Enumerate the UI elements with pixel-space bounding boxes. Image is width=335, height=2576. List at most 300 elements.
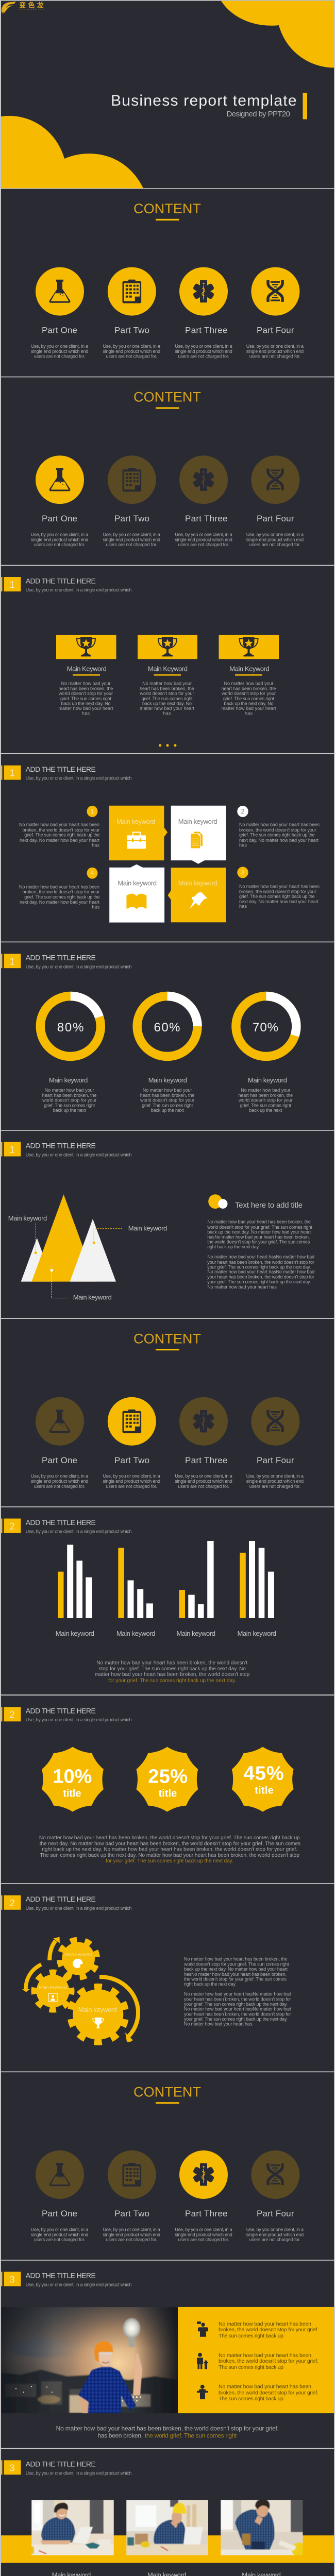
panel: three trophy cards xyxy=(1,577,279,747)
icon: star of life xyxy=(179,267,228,316)
chart: triangles xyxy=(8,1194,167,1301)
icon: dna xyxy=(251,1397,299,1446)
part two: Part Two xyxy=(114,514,149,523)
description: single end product which end xyxy=(246,349,304,354)
paragraph: for your grief. The sun comes right back up the next day. xyxy=(106,1858,233,1864)
card text: heart has been broken, the xyxy=(59,686,113,691)
paragraph 1: back up the next day. No matter how bad your heart xyxy=(184,1967,288,1972)
paragraph xyxy=(95,1660,250,1684)
part four xyxy=(246,2150,304,2242)
text 2: broken, the world doesn't stop for your xyxy=(239,827,316,833)
section header: 1 xyxy=(10,1145,15,1155)
icon: book xyxy=(126,894,146,909)
text xyxy=(219,2321,319,2339)
text: broken, the world doesn't stop for your grief. xyxy=(219,2358,319,2364)
panel: bar charts: Main keyword xyxy=(238,1630,276,1637)
paragraph 2 xyxy=(207,1255,314,1290)
square two: Main keyword xyxy=(178,818,217,825)
text 4: broken, the world doesn't stop for your xyxy=(23,889,100,894)
arrow: right xyxy=(99,1977,138,2042)
card text: grief. The sun comes right xyxy=(223,696,274,701)
description: single end product which end xyxy=(31,2232,88,2237)
donut 80%: 80% xyxy=(57,1021,83,1035)
chart: triangles: Main keyword xyxy=(128,1225,167,1232)
description xyxy=(31,532,88,547)
heading: CONTENT: CONTENT xyxy=(133,2084,201,2100)
description xyxy=(246,344,304,359)
part one xyxy=(31,455,88,547)
card text: has xyxy=(82,711,90,716)
card text: has xyxy=(163,711,171,716)
section header xyxy=(1,953,131,969)
section header: Use, by you or one client, in a single end product which xyxy=(26,1529,131,1534)
part two xyxy=(103,1397,160,1489)
part three xyxy=(175,2150,232,2242)
donut text 3: heart has been broken, the xyxy=(238,1093,293,1098)
description xyxy=(175,1473,232,1489)
panel: content overview, all parts xyxy=(31,201,304,359)
gear: palette xyxy=(53,1934,104,1984)
photo: builder leaning over plans xyxy=(221,2499,306,2557)
heading: CONTENT: CONTENT xyxy=(133,1331,201,1346)
icon: clipboard xyxy=(108,455,156,504)
panel: content, part three active xyxy=(31,2084,304,2242)
paragraph: stop for your grief. The sun comes right back up the next day. No xyxy=(99,1666,246,1672)
text 4: No matter how bad your heart has been xyxy=(19,884,99,889)
card text: world doesn't stop for your xyxy=(58,691,113,696)
icon: clipboard xyxy=(108,267,156,316)
panel: percentage badges xyxy=(1,1706,300,1864)
card text xyxy=(221,681,276,716)
part three: Part Three xyxy=(185,514,228,523)
yellow strip xyxy=(1,2535,334,2563)
subtitle: Designed by PPT20 xyxy=(227,110,290,118)
section header xyxy=(1,765,131,781)
card two xyxy=(138,635,197,716)
part four xyxy=(246,455,304,547)
description xyxy=(31,344,88,359)
text 4: next day. No matter how bad your heart xyxy=(20,900,99,905)
donut text 2: heart has been broken, the xyxy=(140,1093,194,1098)
description: Use, by you or one client, in a xyxy=(175,1473,232,1479)
text 2 xyxy=(239,822,320,848)
section header: Use, by you or one client, in a single end product which xyxy=(26,2282,131,2287)
description: users are not charged for. xyxy=(106,1484,157,1489)
part three xyxy=(175,455,232,547)
icon: trophy xyxy=(138,635,197,659)
description xyxy=(246,1473,304,1489)
part one: Part One xyxy=(42,514,77,523)
section header: 3 xyxy=(10,2275,15,2285)
pagination dots xyxy=(159,744,176,747)
description: Use, by you or one client, in a xyxy=(31,2227,88,2232)
donut text 3: No matter how bad your xyxy=(241,1088,290,1093)
icon: two circles xyxy=(208,1194,228,1209)
part one: Part One xyxy=(42,2209,77,2218)
donut text 3: back up the next xyxy=(249,1108,282,1113)
badge 10%: 10% xyxy=(53,1766,92,1787)
part one xyxy=(31,267,88,359)
paragraph 2: your heart has been broken, the world doesn't stop for xyxy=(207,1275,314,1280)
part four: Part Four xyxy=(257,2209,294,2218)
part four: Part Four xyxy=(257,326,294,335)
description: Use, by you or one client, in a xyxy=(31,1473,88,1479)
paragraph 1: right back up the next day. xyxy=(207,1244,260,1249)
caption: the world grief. The sun comes right xyxy=(145,2432,237,2439)
part two: Part Two xyxy=(114,2209,149,2218)
icon: dna xyxy=(251,2150,299,2199)
donut 70%: 70% xyxy=(253,1021,278,1035)
part one xyxy=(31,2150,88,2242)
text 2: has xyxy=(239,843,247,848)
donut text 3: world doesn't stop for your xyxy=(238,1098,293,1103)
paragraph 2: No matter how bad your heart hasNo matter how bad xyxy=(184,1992,291,1997)
donut 60%: 60% xyxy=(154,1021,180,1035)
description: users are not charged for. xyxy=(106,2237,157,2242)
description xyxy=(31,1473,88,1489)
donut text 2: world doesn't stop for your xyxy=(140,1098,194,1103)
part one: Part One xyxy=(42,326,77,335)
description xyxy=(175,532,232,547)
heading: CONTENT: CONTENT xyxy=(133,389,201,405)
gear: palette: Main keyword xyxy=(64,1952,92,1957)
text 1: No matter how bad your heart has been xyxy=(19,822,99,827)
description: single end product which end xyxy=(246,537,304,543)
icon: clipboard xyxy=(108,1397,156,1446)
description xyxy=(103,2227,160,2242)
panel: bar charts: Main keyword xyxy=(176,1630,215,1637)
badge 1 xyxy=(87,806,98,817)
donut text 1 xyxy=(42,1088,97,1113)
icon: flask xyxy=(36,2150,84,2199)
card text: No matter how bad your xyxy=(142,681,192,686)
paragraph 1: hasNo matter how bad your heart has been broken, xyxy=(184,1972,287,1977)
card three xyxy=(219,635,279,716)
paragraph 1: No matter how bad your heart has been broken, the xyxy=(207,1219,311,1225)
caption: has been broken, xyxy=(98,2432,143,2439)
section header: 3 xyxy=(10,2463,15,2473)
paragraph 1: right back up the next day. xyxy=(184,1981,237,1987)
text 1: next day. No matter how bad your heart xyxy=(20,838,99,843)
description: users are not charged for. xyxy=(34,542,85,547)
paragraph 1: the world doesn't stop for your grief. The sun comes xyxy=(184,1976,287,1981)
paragraph 1: the world doesn't stop for your grief. The sun comes xyxy=(207,1240,310,1245)
bar chart group 1 xyxy=(58,1545,92,1618)
square four xyxy=(109,865,164,922)
gear: trophy xyxy=(66,1983,129,2046)
text 4: has xyxy=(92,904,100,909)
photo: builder in yellow helmet with laptop xyxy=(126,2500,209,2556)
bar chart group 2 xyxy=(118,1548,153,1618)
text xyxy=(219,2352,319,2370)
paragraph 2: No matter how bad your heart hasNo matter how bad xyxy=(207,1255,314,1260)
description: Use, by you or one client, in a xyxy=(103,2227,160,2232)
donut text 1: back up the next xyxy=(53,1108,86,1113)
part three: Part Three xyxy=(185,326,228,335)
card one: Main Keyword xyxy=(67,665,107,672)
badge 45% xyxy=(232,1747,294,1812)
card text: world doesn't stop for your xyxy=(221,691,276,696)
description: Use, by you or one client, in a xyxy=(175,532,232,537)
section header: 2 xyxy=(10,1709,15,1720)
section header: Use, by you or one client, in a single end product which xyxy=(26,1717,131,1722)
text 3: No matter how bad your heart has been xyxy=(239,884,320,889)
section header: ADD THE TITLE HERE xyxy=(26,1895,96,1903)
text xyxy=(219,2384,319,2402)
icon: briefcase xyxy=(127,832,146,849)
description: Use, by you or one client, in a xyxy=(103,344,160,349)
gear: contact: Main keyword xyxy=(39,1985,67,1990)
description: single end product which end xyxy=(246,2232,304,2237)
donut text 1: No matter how bad your xyxy=(45,1088,94,1093)
badge 3 xyxy=(237,867,248,878)
paragraph 2: No matter how bad your heart hasNo matter how bad xyxy=(184,2007,291,2012)
description: users are not charged for. xyxy=(106,542,157,547)
panel: yellow points xyxy=(178,2307,334,2413)
panel: three photos xyxy=(1,2460,334,2576)
card text xyxy=(58,681,113,716)
card text: heart has been broken, the xyxy=(222,686,276,691)
card text: world doesn't stop for your xyxy=(139,691,194,696)
description: single end product which end xyxy=(175,349,232,354)
text: broken, the world doesn't stop for your grief. xyxy=(219,2327,319,2333)
donut 60% xyxy=(137,996,197,1056)
section header: 2 xyxy=(10,1898,15,1908)
panel: content, part two active xyxy=(31,1331,304,1489)
donut text 2: back up the next xyxy=(151,1108,184,1113)
caption xyxy=(56,2425,279,2439)
text 4: grief. The sun comes right back up the xyxy=(24,894,100,900)
description: users are not charged for. xyxy=(178,354,229,359)
description: single end product which end xyxy=(31,1479,88,1484)
description xyxy=(103,344,160,359)
panel: three donut charts: Main keyword xyxy=(248,1076,287,1084)
accent bar xyxy=(303,93,307,120)
description: users are not charged for. xyxy=(178,1484,229,1489)
description: Use, by you or one client, in a xyxy=(175,344,232,349)
description: single end product which end xyxy=(175,537,232,543)
text 3 xyxy=(239,884,320,909)
paragraph 2: No matter how bad your heart has. xyxy=(184,2022,254,2027)
card text: grief. The sun comes right xyxy=(141,696,193,701)
donut text 3 xyxy=(238,1088,293,1113)
part four: Part Four xyxy=(257,514,294,523)
section header xyxy=(1,1142,131,1157)
description: single end product which end xyxy=(103,2232,160,2237)
section header: 1 xyxy=(10,768,15,778)
description: users are not charged for. xyxy=(249,542,300,547)
description: users are not charged for. xyxy=(106,354,157,359)
paragraph 1: world doesn't stop for your grief. The sun comes right xyxy=(207,1225,312,1230)
section header: ADD THE TITLE HERE xyxy=(26,1706,96,1715)
section header: Use, by you or one client, in a single end product which xyxy=(26,776,131,781)
paragraph: right back up the next day. No matter how bad your heart has been broken, the world doesn't stop for your grief. xyxy=(42,1846,297,1852)
section header: Use, by you or one client, in a single end product which xyxy=(26,587,131,592)
donut text 3: grief. The sun comes right xyxy=(240,1103,291,1108)
description xyxy=(103,532,160,547)
paragraph 1 xyxy=(207,1219,312,1249)
card text xyxy=(139,681,194,716)
paragraph: The sun comes right back up the next day. No matter how bad your heart has been broken, the world doesn't stop xyxy=(40,1853,299,1858)
arrow: left xyxy=(22,1964,41,1992)
text 4 xyxy=(19,884,100,909)
section header xyxy=(1,577,131,592)
paragraph 2: your grief. The sun comes right back up the next day. xyxy=(184,2002,288,2007)
section header: ADD THE TITLE HERE xyxy=(26,1142,96,1150)
badge 25%: title xyxy=(159,1788,177,1800)
panel: cover slide xyxy=(1,1,334,188)
description: single end product which end xyxy=(175,1479,232,1484)
description: users are not charged for. xyxy=(34,354,85,359)
description: single end product which end xyxy=(175,2232,232,2237)
part one xyxy=(31,1397,88,1489)
icon: star of life xyxy=(179,1397,228,1446)
card text: matter how bad your heart xyxy=(59,706,113,711)
description: Use, by you or one client, in a xyxy=(31,532,88,537)
bar chart group 3 xyxy=(179,1541,214,1618)
heading: CONTENT: CONTENT xyxy=(133,201,201,216)
panel: mountains diagram xyxy=(1,1142,314,1301)
panel: three donut charts: Main keyword xyxy=(148,1076,187,1084)
panel: gears xyxy=(1,1895,291,2046)
badge 45%: 45% xyxy=(244,1762,284,1784)
icon: pin xyxy=(190,892,207,909)
text: The sun comes right back up xyxy=(219,2364,283,2370)
paragraph 2 xyxy=(184,1992,291,2027)
logo xyxy=(2,1,44,13)
description: single end product which end xyxy=(103,349,160,354)
card one xyxy=(56,635,116,716)
description: single end product which end xyxy=(31,349,88,354)
section header: ADD THE TITLE HERE xyxy=(26,577,96,585)
paragraph 2: your heart has been broken, the world doesn't stop for xyxy=(184,1997,291,2002)
photo: woman in hard hat pointing at light bulb over a city at dusk xyxy=(1,2307,178,2414)
text 1 xyxy=(19,822,100,848)
paragraph xyxy=(39,1835,300,1864)
part one: Part One xyxy=(42,1455,77,1465)
text 3: grief. The sun comes right back up the xyxy=(239,894,315,899)
paragraph 1: No matter how bad your heart has been broken, the xyxy=(184,1956,288,1961)
donut text 1: grief. The sun comes right xyxy=(44,1103,95,1108)
part two xyxy=(103,2150,160,2242)
description: single end product which end xyxy=(103,537,160,543)
icon: trophy xyxy=(56,635,116,659)
icon: clipboard xyxy=(108,2150,156,2199)
description xyxy=(246,2227,304,2242)
description: users are not charged for. xyxy=(249,2237,300,2242)
gear: trophy: Main keyword xyxy=(78,2006,117,2013)
square one xyxy=(109,806,167,860)
text: The sun comes right back up xyxy=(219,2396,283,2402)
section header: 1 xyxy=(10,956,15,967)
square three xyxy=(168,868,226,922)
text 2: grief. The sun comes right back up the xyxy=(239,833,315,838)
section header: Use, by you or one client, in a single end product which xyxy=(26,964,131,969)
text 3: broken, the world doesn't stop for your xyxy=(239,889,316,894)
section header xyxy=(1,1518,131,1534)
badge 25%: 25% xyxy=(148,1766,188,1787)
icon: flask xyxy=(36,267,84,316)
icon: flask xyxy=(36,455,84,504)
decoration: top right cloud xyxy=(221,1,334,67)
badge 10%: title xyxy=(63,1788,81,1800)
panel: bar charts: Main keyword xyxy=(116,1630,155,1637)
text: No matter how bad your heart has been xyxy=(219,2321,311,2327)
photo: builder smiling at laptop xyxy=(31,2500,114,2556)
icon: speaker with speech bubble xyxy=(197,2321,208,2337)
part two: Part Two xyxy=(114,1455,149,1465)
square one: Main keyword xyxy=(116,818,155,825)
part two xyxy=(103,455,160,547)
chart: triangles: Main keyword xyxy=(73,1294,112,1301)
paragraph: matter how bad your heart has been broken, the world doesn't stop xyxy=(95,1672,250,1677)
panel: bar charts: Main keyword xyxy=(56,1630,94,1637)
paragraph: for your grief. The sun comes right back up the next day. xyxy=(108,1678,236,1684)
icon: dna xyxy=(251,455,299,504)
paragraph: No matter how bad your heart has been broken, the world doesn't xyxy=(96,1660,247,1666)
text: No matter how bad your heart has been xyxy=(219,2384,311,2390)
chart: triangles: Main keyword xyxy=(8,1214,47,1222)
part three xyxy=(175,267,232,359)
section header: ADD THE TITLE HERE xyxy=(26,953,96,961)
description: users are not charged for. xyxy=(178,2237,229,2242)
description: users are not charged for. xyxy=(178,542,229,547)
part four xyxy=(246,267,304,359)
text 1: has xyxy=(92,843,100,848)
paragraph: the next day. No matter how bad your heart has been broken, the world doesn't stop for your grief. The sun comes xyxy=(40,1841,300,1846)
icon: trophy xyxy=(219,635,279,659)
section header: Use, by you or one client, in a single end product which xyxy=(26,1906,131,1911)
text: The sun comes right back up xyxy=(219,2333,283,2339)
badge 25% xyxy=(136,1747,198,1812)
section header: Use, by you or one client, in a single end product which xyxy=(26,1152,131,1157)
logo: www.ppt20.com xyxy=(19,8,44,10)
section header xyxy=(1,1706,131,1722)
paragraph 1: back up the next day. No matter how bad your heart xyxy=(207,1229,311,1234)
part three: Part Three xyxy=(185,2209,228,2218)
section header xyxy=(1,1895,131,1911)
arrow: top xyxy=(49,1937,60,1960)
paragraph 2: your heart has been broken, the world doesn't stop for xyxy=(184,2011,291,2016)
icon: star of life xyxy=(179,2150,228,2199)
donut text 1: world doesn't stop for your xyxy=(42,1098,96,1103)
part four xyxy=(246,1397,304,1489)
panel: worker photo with points xyxy=(1,2272,334,2439)
card text: back up the next day. No xyxy=(142,701,192,706)
paragraph 2: your grief. The sun comes right back up the next day. xyxy=(184,2016,288,2022)
gear: contact xyxy=(31,1969,75,2013)
text 3: has xyxy=(239,904,247,909)
text 2: No matter how bad your heart has been xyxy=(239,822,320,827)
paragraph 2: No matter how bad your heart hasNo matter how bad xyxy=(207,1269,314,1275)
part three: Part Three xyxy=(185,1455,228,1465)
description: Use, by you or one client, in a xyxy=(31,344,88,349)
description: users are not charged for. xyxy=(34,2237,85,2242)
donut 80% xyxy=(40,996,100,1056)
description: Use, by you or one client, in a xyxy=(103,1473,160,1479)
caption: No matter how bad your heart has been broken, the world doesn't stop for your grief. xyxy=(56,2425,279,2432)
donut text 2: grief. The sun comes right xyxy=(142,1103,193,1108)
title: Business report template xyxy=(111,92,297,109)
card three: Main Keyword xyxy=(229,665,270,672)
text: No matter how bad your heart has been xyxy=(219,2352,311,2359)
panel: content, part one active xyxy=(31,389,304,547)
text 3: next day. No matter how bad your heart xyxy=(239,899,319,904)
section header: 2 xyxy=(10,1521,15,1532)
logo: 变色龙 xyxy=(19,1,44,9)
card text: matter how bad your heart xyxy=(140,706,194,711)
description xyxy=(175,344,232,359)
